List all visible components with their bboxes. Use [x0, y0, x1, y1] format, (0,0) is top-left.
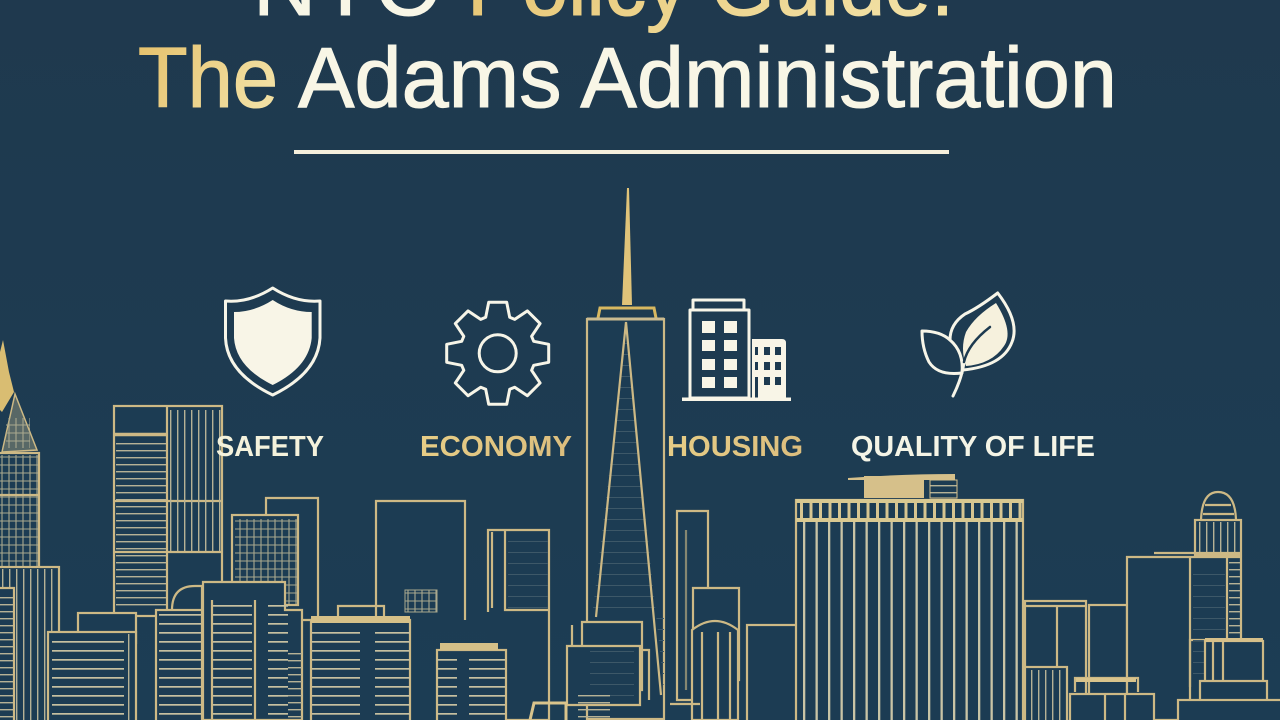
quality of life column [851, 293, 1095, 463]
title line 1 (cropped at the top) [253, 0, 954, 34]
building: narrow hatched block [488, 530, 549, 720]
building: tower front blocks [530, 622, 649, 720]
building: large colonnade tower [796, 474, 1023, 720]
building: right mid blocks [1025, 601, 1127, 720]
label: housing: HOUSING [667, 431, 803, 463]
title [138, 0, 1117, 126]
title line 2: Adams Administration [298, 31, 1117, 126]
skyline [0, 188, 1280, 720]
title line 2: The [138, 31, 278, 126]
economy column [420, 302, 572, 463]
building: grid block [232, 498, 318, 620]
building: low left blocks [48, 582, 302, 720]
label: safety: SAFETY [216, 431, 324, 463]
building: low detailed block [1025, 667, 1154, 720]
building: far-right stepped block [1178, 638, 1280, 720]
safety column [216, 288, 324, 463]
icon: shield [226, 288, 320, 395]
label: quality of life: QUALITY OF LIFE [851, 431, 1095, 463]
label: economy: ECONOMY [420, 431, 572, 463]
building: far-left spire tower [0, 340, 59, 720]
building: low capped block centre [437, 643, 506, 720]
icon: buildings [682, 300, 791, 401]
building: narrow spire right of tower [670, 511, 797, 720]
building: capped block [311, 606, 410, 720]
icon: leaf [922, 293, 1014, 396]
building: right domed tower [1127, 492, 1241, 720]
title divider [294, 150, 949, 154]
housing column [667, 300, 803, 463]
icon: gear [447, 302, 549, 404]
building: freedom tower [587, 188, 664, 719]
building: tall outline behind [376, 501, 465, 620]
building: tall tower left [114, 406, 222, 616]
